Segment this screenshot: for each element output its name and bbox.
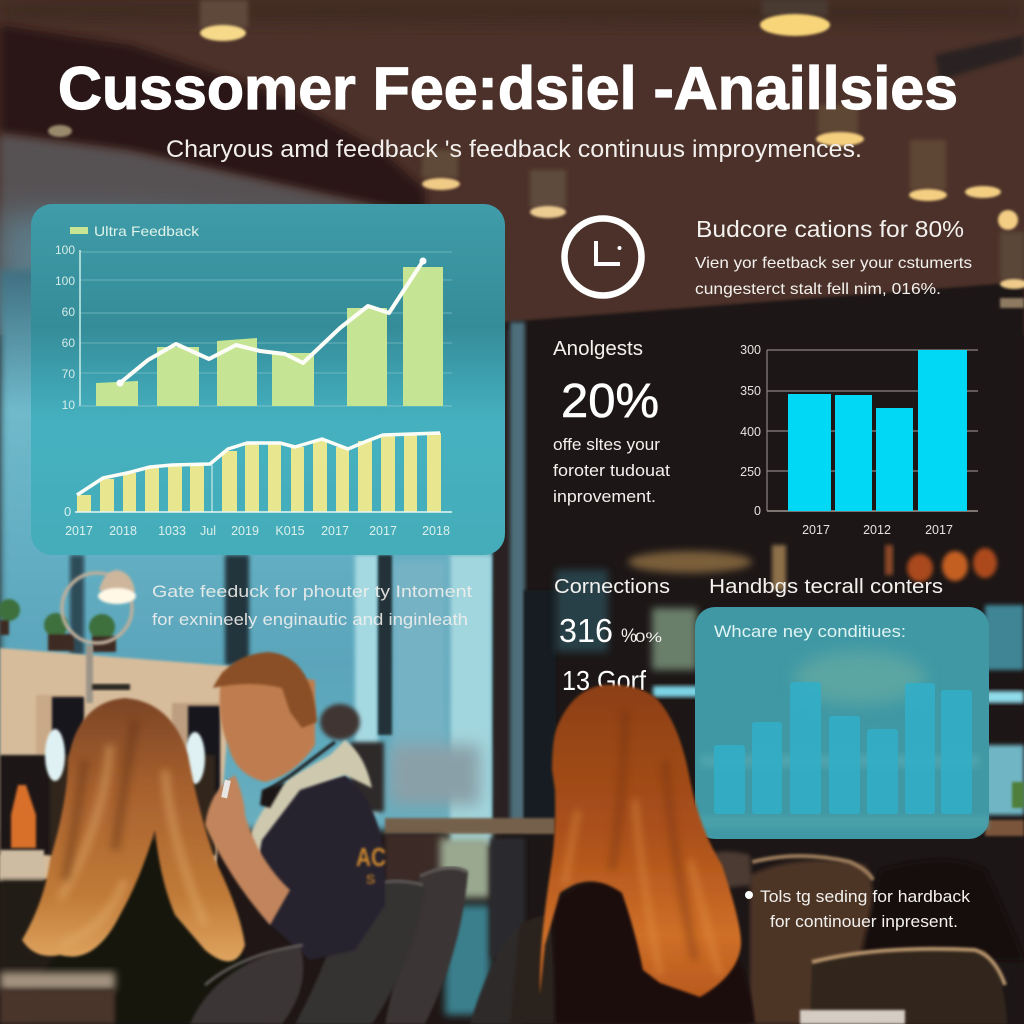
cyan bar chart: 2017 xyxy=(802,523,830,537)
text block: budcore cations: Budcore cations for 80% xyxy=(696,216,964,242)
lower bar and line chart: Jul xyxy=(200,524,216,538)
plants xyxy=(0,599,116,652)
cyan bar chart: 2017 xyxy=(925,523,953,537)
cyan bar chart: 2012 xyxy=(863,523,891,537)
title: Cussomer Fee:dsiel -Anaillsies xyxy=(58,55,958,122)
stat: cornections xyxy=(554,576,670,696)
foreground chair and table left xyxy=(0,945,303,1024)
upper bar and line chart: 10 xyxy=(62,398,75,412)
person: man in hoodie xyxy=(205,652,386,960)
panel: conditions bar chart: Whcare ney conditiues: xyxy=(714,622,906,641)
callout: tools for hardback: for continouer inpresent. xyxy=(770,913,958,931)
lower bar and line chart: 2018 xyxy=(109,524,137,538)
lower bar and line chart: 2017 xyxy=(65,524,93,538)
person: man in hoodie: S xyxy=(366,871,375,887)
ceiling lights xyxy=(48,0,1024,308)
lower bar and line chart: K015 xyxy=(275,524,305,538)
lower bar and line chart: 2019 xyxy=(231,524,259,538)
cyan bar chart: 400 xyxy=(740,425,761,439)
text block: budcore cations xyxy=(695,216,972,298)
stat: anolgests 20%: Anolgests xyxy=(553,338,643,360)
callout: tools for hardback: Tols tg seding for hardback xyxy=(760,888,971,906)
text block: gate feeduck: Gate feeduck for phouter ty Intoment xyxy=(152,583,472,601)
stat: cornections: % xyxy=(621,626,637,647)
person: woman right xyxy=(540,685,755,1024)
stat: anolgests 20%: offe sltes your xyxy=(553,436,661,454)
lamp xyxy=(62,570,136,703)
cyan bar chart: 300 xyxy=(740,343,761,357)
stat: cornections: 316 xyxy=(559,612,613,649)
callout: tools for hardback xyxy=(745,888,971,931)
subtitle: Charyous amd feedback 's feedback continuus improymences. xyxy=(166,136,862,163)
upper bar and line chart: 100 xyxy=(55,274,75,288)
person: woman left xyxy=(22,698,262,1024)
back-wall shelves and windows xyxy=(556,570,608,652)
lower bar and line chart: 2018 xyxy=(422,524,450,538)
stat: anolgests 20%: foroter tudouat xyxy=(553,462,670,480)
back counter xyxy=(0,648,230,880)
lower bar and line chart: 1033 xyxy=(158,524,186,538)
legend: Ultra Feedback xyxy=(94,223,200,239)
upper bar and line chart: 60 xyxy=(62,336,75,350)
lower bar and line chart: 2017 xyxy=(369,524,397,538)
cyan bar chart: 250 xyxy=(740,465,761,479)
text block: gate feeduck: for exnineely enginautic and inginleath xyxy=(152,611,468,629)
stat: anolgests 20% xyxy=(553,338,670,506)
stat: anolgests 20%: 20% xyxy=(561,375,659,428)
chairs and furniture xyxy=(295,852,1024,1024)
icon: clock xyxy=(564,218,642,296)
text block: budcore cations: Vien yor feetback ser your cstumerts xyxy=(695,255,972,272)
lower bar and line chart xyxy=(64,433,452,538)
cyan bar chart: 0 xyxy=(754,504,761,518)
heading: handbags: Handbgs tecrall conters xyxy=(709,576,943,598)
upper bar and line chart: 100 xyxy=(55,243,75,257)
window wall xyxy=(0,270,495,830)
stat: anolgests 20%: inprovement. xyxy=(553,488,656,506)
text block: gate feeduck xyxy=(152,583,472,629)
lower bar and line chart: 2017 xyxy=(321,524,349,538)
upper bar and line chart: 70 xyxy=(62,367,75,381)
lower bar and line chart: 0 xyxy=(64,504,71,519)
person: man in hoodie: AC xyxy=(356,842,386,872)
cyan bar chart xyxy=(740,343,978,537)
upper bar and line chart: 60 xyxy=(62,305,75,319)
table and lower window xyxy=(385,818,555,834)
stat: cornections: 0% xyxy=(635,629,662,645)
upper bar and line chart xyxy=(55,243,452,412)
panel: conditions bar chart xyxy=(695,607,989,839)
cyan bar chart: 350 xyxy=(740,384,761,398)
stat: cornections: Cornections xyxy=(554,576,670,598)
text block: budcore cations: cungesterct stalt fell nim, 016%. xyxy=(695,281,941,298)
panel: ultra feedback charts xyxy=(31,204,505,555)
stat: cornections: 13 Gorf xyxy=(562,665,646,696)
